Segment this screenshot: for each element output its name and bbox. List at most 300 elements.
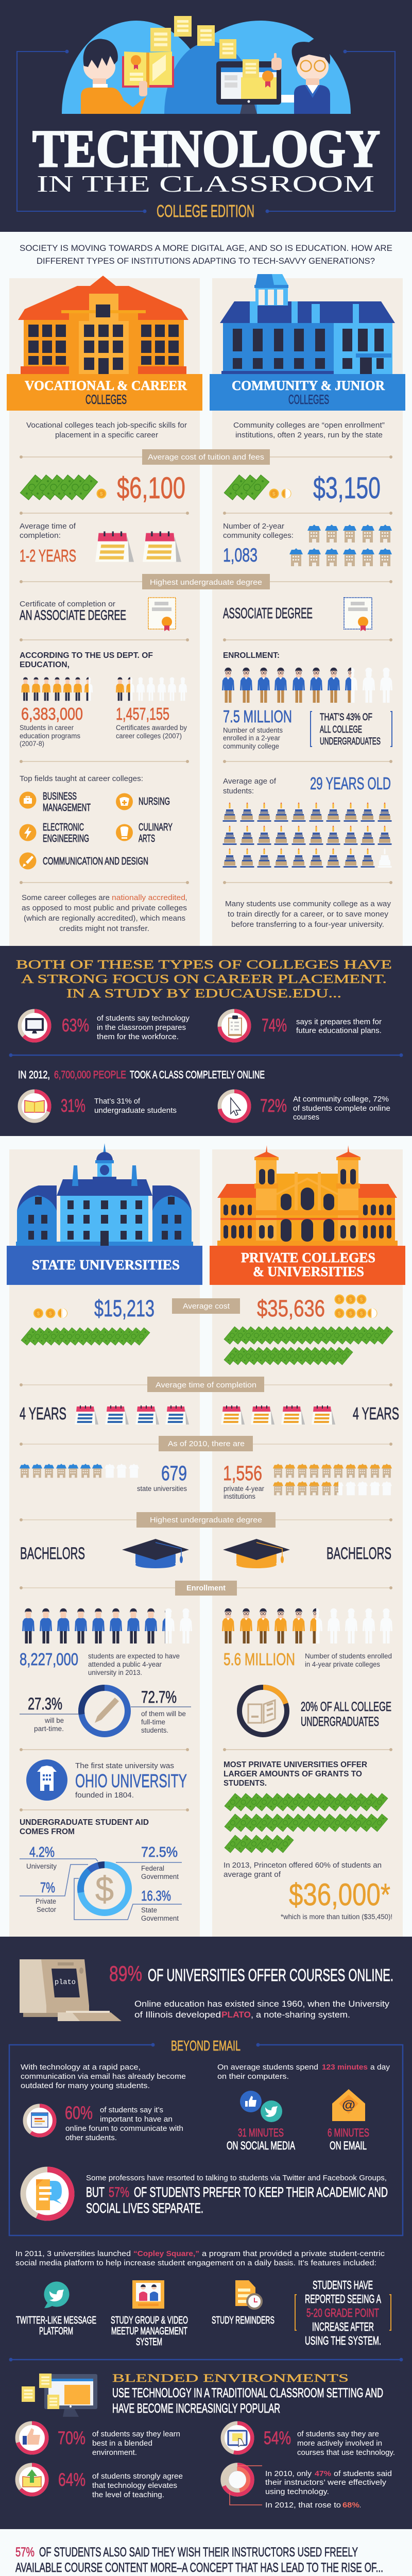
chart: instructors using technology: their instructors’ were effectively [265,2478,387,2487]
hero illustration: students and tablet [62,16,351,114]
text: copley square: social media platform to help increase student engagement on a daily basis. It’s features included: [15,2259,376,2267]
heading: online class takers [18,1069,265,1081]
fact: first state university: The first state university was [75,1762,174,1770]
cost chart: bills and coins [224,475,291,500]
fact: first state university [26,1759,187,1801]
heading: open content [15,2545,383,2575]
donut chart: student aid sources: Sector [37,1906,56,1913]
stat: 6,383,000 students: Students in career [20,724,74,732]
banner: community and junior: COMMUNITY & JUNIOR [232,378,385,393]
stat: Princeton grant: average grant of [224,1871,281,1879]
text: online education history: of Illinois developed [134,2010,221,2020]
stat: 70 percent blended [17,2423,180,2457]
donut chart: part time and full time [20,1685,191,1737]
field: culinary arts [116,822,173,844]
accreditation note: , [185,893,187,902]
feature: twitter-like platform: PLATFORM [39,2326,73,2337]
heading: online class takers: TOOK A CLASS COMPLETELY ONLINE [130,1069,265,1081]
description: Community colleges are “open enrollment” [233,421,385,430]
stat: 6 minutes on email: ON EMAIL [330,2139,367,2152]
accreditation note: nationally accredited [112,893,185,902]
donut chart: student aid sources [20,1844,182,1923]
stat: 60 percent forum: 60% [65,2103,93,2123]
intro text [20,243,392,266]
donut chart: student aid sources: University [26,1862,57,1870]
stat: 5.6 million: in 4-year private colleges [305,1660,380,1668]
donut chart: 20 percent of undergraduates [239,1687,391,1735]
field: electronic engineering: ELECTRONIC [43,822,84,833]
heading: educause study: BOTH OF THESE TYPES OF COLLEGES HAVE [16,958,392,972]
donut chart: part time and full time: 72.7% [141,1688,177,1706]
degree [20,600,126,623]
donut chart: student aid sources: Government [141,1914,179,1922]
text: copley square: a program that provided a private student-centric [202,2249,385,2258]
donut chart: student aid sources: Federal [141,1865,164,1872]
stat: 5.6 million: 5.6 MILLION [224,1650,295,1669]
chart: instructors using technology: 68% [342,2501,359,2510]
banner: vocational and career: COLLEGES [85,393,127,407]
stat: 64 percent teaching: of students strongly agree [92,2472,183,2481]
illustration: blue university building [16,1143,193,1246]
banner: state universities: STATE UNIVERSITIES [32,1257,180,1273]
icon: plato computer: plato [55,1978,76,1987]
stat: 72 percent community college: At community college, 72% [293,1095,389,1104]
heading: open content: 57% [15,2545,35,2560]
stat: 60 percent forum: of students say it’s [100,2106,163,2114]
stat: 1,556 private institutions [223,1462,264,1500]
stat: 4 years: 4 YEARS [20,1404,66,1423]
donut chart: student aid sources: State [141,1906,157,1914]
panel: state universities [7,1143,202,1937]
shared label: enrollment: Enrollment [186,1584,226,1592]
donut chart: part time and full time: of them will be [141,1710,186,1718]
stat: 63 percent workforce [20,1011,190,1041]
intro text: DIFFERENT TYPES OF INSTITUTIONS ADAPTING TO TECH-SAVVY GENERATIONS? [37,256,375,266]
shared label: as of 2010 [20,1436,392,1451]
stat: 679 state universities [137,1462,187,1493]
icon: graduation cap [223,1539,290,1568]
number of colleges [223,522,294,566]
text: online education history: Online education has existed since 1960, when the University [134,1999,390,2009]
stat: 7.5 million: enrolled in a 2-year [223,734,280,742]
heading: student aid [20,1818,149,1836]
stat: 8,227,000: university in 2013. [88,1669,142,1676]
accreditation note: (which are regionally accredited), which means [24,914,185,923]
heading: private grants: STUDENTS. [224,1779,267,1788]
stat: 63 percent workforce: in the classroom prepares [97,1024,186,1032]
field: culinary arts: CULINARY [139,822,173,833]
header panel [0,0,412,232]
icon: diploma [344,598,372,631]
feature: study reminders [212,2280,274,2326]
stat: 5.6 million [224,1650,392,1669]
stat: average age: students: [223,787,254,795]
time of completion [20,522,76,565]
shared label: highest undergraduate degree [20,1512,392,1528]
chart: grant bills [225,1793,388,1853]
intro text: SOCIETY IS MOVING TOWARDS A MORE DIGITAL AGE, AND SO IS EDUCATION. HOW ARE [20,243,392,253]
stat: 31 minutes on social media: ON SOCIAL MEDIA [227,2139,295,2152]
donut chart: student aid sources: 16.3% [141,1888,171,1904]
heading: educause study [16,958,392,1001]
stat: 6 minutes on email: 6 MINUTES [328,2126,369,2139]
donut chart: part time and full time: students. [141,1726,168,1734]
cost chart: bills and coin [20,475,107,500]
stat: 679 state universities: state universities [137,1485,187,1493]
chart: coins and stat $15,213 [33,1295,154,1321]
callout: 43 percent of undergraduates: THAT’S 43% OF [320,712,372,723]
headline: 89 percent [109,1961,393,1986]
stat: 1,457,155 certificates: Certificates awarded by [116,724,187,732]
stat: 31 percent undergraduates: 31% [61,1096,85,1116]
stat: 1,556 private institutions: institutions [224,1493,255,1500]
stat: 64 percent teaching: the level of teaching. [92,2491,164,2499]
stat: 8,227,000: students are expected to have [88,1652,180,1660]
feature: twitter-like platform: TWITTER-LIKE MESSAGE [16,2315,96,2326]
stat: 679 state universities: 679 [161,1462,187,1485]
icon: email envelope: @ [342,2098,355,2112]
title: IN THE CLASSROOM [37,171,374,197]
heading: educause study: IN A STUDY BY EDUCAUSE.EDU... [66,987,341,1001]
stat: 8,227,000: 8,227,000 [20,1650,78,1669]
community college note: before transferring to a four-year university. [231,920,384,929]
stat: 54 percent involved [222,2423,395,2457]
stat: 1,457,155 certificates: 1,457,155 [116,704,169,723]
stat: 63 percent workforce: 63% [62,1015,89,1036]
icon: orange calendars [221,1405,335,1425]
text: online education history: , a note-sharing system. [251,2010,350,2020]
panel: private colleges and universities [210,1145,405,1937]
chart: instructors using technology [222,2465,392,2510]
heading: student aid: COMES FROM [20,1827,75,1836]
stat: 64 percent teaching: that technology elevates [92,2482,177,2490]
description: institutions, often 2 years, run by the state [235,431,383,439]
text: copley square: “Copley Square,” [133,2249,199,2258]
callout: grade point increase: STUDENTS HAVE [313,2278,373,2292]
stat: 6,383,000 students: 6,383,000 [21,704,83,723]
stat: $6,100: $6,100 [117,471,185,505]
donut chart: student aid sources: 72.5% [141,1844,178,1860]
stat: Princeton grant: $36,000* [289,1877,390,1912]
shared label: average time of completion [20,1377,392,1392]
donut chart: student aid sources: Private [36,1897,56,1905]
donut chart: student aid sources: 7% [40,1879,55,1895]
stat: 57 percent separate lives: BUT [86,2184,105,2200]
stat: 54 percent involved: courses that use technology. [297,2449,395,2457]
stat: 60 percent forum [25,2103,183,2142]
stat: 7.5 million: community college [223,742,279,750]
heading: us dept of education: ACCORDING TO THE US DEPT. OF [20,651,153,660]
donut chart: student aid sources: 4.2% [29,1844,55,1860]
feature: study group [111,2280,188,2348]
accreditation note: credits might not transfer. [59,924,149,933]
icon: calendars [95,531,181,562]
stat: 70 percent blended: environment. [92,2449,137,2457]
stat: 54 percent involved: more actively involved in [297,2439,382,2448]
text: minutes on computers: 123 minutes [322,2063,368,2072]
banner: state universities [7,1246,202,1285]
icon: blended monitor [22,2374,97,2417]
pictogram: state universities count [20,1464,139,1478]
chart: instructors using technology: 47% [315,2469,331,2478]
field: electronic engineering [20,822,89,844]
chart: coins and stat $35,636 [257,1294,377,1321]
stat: 64 percent teaching [17,2465,183,2499]
text: email outdated: With technology at a rapid pace, [21,2063,141,2072]
banner: private colleges: PRIVATE COLLEGES [241,1250,375,1265]
text: email outdated: communication via email has already become [21,2072,186,2081]
stat: 1,556 private institutions: 1,556 [223,1462,262,1485]
pictogram: public enrollment [22,1608,192,1643]
donut chart: part time and full time: will be [44,1717,64,1724]
banner: private colleges [210,1246,405,1285]
banner: vocational and career [7,374,202,411]
degree: ASSOCIATE DEGREE [223,605,313,622]
icon: plato computer [20,1959,122,2021]
icon: email envelope [332,2089,365,2121]
headline: 89 percent: 89% [109,1961,142,1986]
heading: us dept of education [20,651,153,669]
heading: blended environments [112,2371,383,2416]
top fields list: Top fields taught at career colleges: [20,775,143,783]
donut chart: part time and full time: full-time [141,1718,165,1726]
shared label: highest undergraduate degree: Highest undergraduate degree [150,579,262,587]
time of completion: Average time of [20,522,76,531]
shared label: average cost of tuition: Average cost of tuition and fees [148,453,264,462]
field: nursing [116,793,170,810]
stat: 1,556 private institutions: private 4-year [224,1485,264,1493]
stat: 6,383,000 students: education programs [20,732,80,740]
top fields list [20,775,173,870]
stat: 54 percent involved: 54% [264,2428,291,2448]
description: placement in a specific career [55,431,158,439]
stat: 31 percent undergraduates [20,1091,177,1121]
banner: community and junior [210,374,405,411]
chart: instructors using technology: In 2010, only [265,2469,312,2478]
stat: Princeton grant [224,1861,392,1921]
shared label: average cost of tuition [20,449,392,465]
field: business management: MANAGEMENT [43,802,91,814]
text: copley square [15,2249,385,2267]
stat: bachelors: BACHELORS [20,1544,85,1563]
banner: vocational and career: VOCATIONAL & CAREER [25,378,187,393]
stat: 72 percent community college: 72% [260,1096,287,1116]
heading: online class takers: IN 2012, [18,1069,50,1081]
degree: Certificate of completion or [20,600,115,608]
shared label: highest undergraduate degree: Highest undergraduate degree [150,1516,262,1524]
chart: bills private [224,1327,393,1365]
illustration: orange college building [18,276,188,374]
stat: 60 percent forum: online forum to communicate with [65,2125,183,2133]
stat: 72 percent community college: courses [293,1113,319,1122]
description [233,421,385,439]
pictogram: private institutions count [273,1464,392,1495]
pictogram: birthday cakes [222,802,391,868]
donut chart: part time and full time: part-time. [34,1725,64,1733]
stat: average age [223,774,391,795]
banner: private colleges: & UNIVERSITIES [253,1264,364,1279]
dark panel: career placement [0,946,412,1136]
donut chart: student aid sources: $ [95,1870,114,1909]
title: TECHNOLOGY [32,120,380,178]
number of colleges: Number of 2-year [223,522,284,531]
stat: 7.5 million [223,707,292,750]
stat: 57 percent separate lives [23,2170,388,2218]
feature: twitter-like platform [16,2281,96,2337]
donut chart: part time and full time: 27.3% [28,1694,62,1713]
stat: 74 percent plans: says it prepares them for [296,1018,382,1026]
stat: Princeton grant: *which is more than tuition ($35,450)! [281,1913,392,1921]
banner: community and junior: COLLEGES [288,393,329,407]
stat: 7.5 million: Number of students [223,726,283,734]
donut chart: student aid sources: Government [141,1873,179,1880]
field: business management: BUSINESS [43,791,77,802]
community college note [225,900,391,929]
heading: student aid: UNDERGRADUATE STUDENT AID [20,1818,149,1827]
section: moocs [15,2547,383,2572]
shared label: highest undergraduate degree [20,574,392,589]
text: minutes on computers [217,2063,390,2081]
feature: study group: SYSTEM [136,2336,162,2348]
heading: private grants: MOST PRIVATE UNIVERSITIES OFFER [224,1760,367,1769]
stat: 57 percent separate lives: Some professors have resorted to talking to students via Twitter and Facebook Groups, [86,2174,387,2182]
accreditation note: as opposed to most public and private colleges [22,904,187,912]
community college note: to train directly for a career, or to save money [228,910,389,919]
pictogram: certificates awarded [116,677,187,701]
chart: instructors using technology: . [359,2501,361,2510]
time of completion: 1-2 YEARS [20,546,76,565]
stat: 74 percent plans [219,1011,382,1041]
stat: 6,383,000 students: (2007-8) [20,740,44,748]
description [26,421,187,439]
field: business management [20,791,91,814]
callout: grade point increase: 5-20 GRADE POINT [306,2306,379,2319]
stat: 64 percent teaching: 64% [58,2470,85,2490]
heading: online class takers: 6,700,000 PEOPLE [54,1069,126,1081]
stat: 8,227,000: attended a public 4-year [88,1660,162,1668]
stat: 6,383,000 students [20,704,83,748]
number of colleges: community colleges: [223,532,294,540]
callout: 43 percent of undergraduates: ALL COLLEGE [320,724,362,735]
pictogram: private enrollment [222,1608,392,1643]
icon: diploma [148,598,176,631]
number of colleges: 1,083 [223,545,258,566]
fact: first state university: founded in 1804. [75,1791,134,1800]
callout: grade point increase: INCREASE AFTER [312,2320,374,2333]
stat: 63 percent workforce: them for the workforce. [97,1033,179,1041]
stat: 60 percent forum: other students. [65,2134,117,2142]
illustration: orange university building [217,1145,398,1246]
stat: 5.6 million: Number of students enrolled [305,1652,392,1660]
dark panel: online courses [0,1937,412,2529]
fact: first state university: OHIO UNIVERSITY [75,1770,187,1791]
feature: study reminders: STUDY REMINDERS [212,2315,274,2326]
stat: 57 percent separate lives: 57% [109,2184,129,2200]
heading: private grants [224,1760,367,1788]
text: online education history [134,1999,390,2020]
pictogram: students in career programs [21,677,93,701]
text: minutes on computers: a day [370,2063,390,2072]
stat: 1,457,155 certificates: career colleges (2007) [116,732,182,740]
stat: 31 percent undergraduates: undergraduate students [94,1107,177,1115]
stat: 54 percent involved: of students say they are [297,2430,379,2438]
stat: 1,457,155 certificates [116,704,187,740]
stat: 74 percent plans: 74% [262,1015,287,1036]
stat: 31 minutes on social media: 31 MINUTES [238,2126,284,2139]
stat: 60 percent forum: important to have an [100,2115,173,2124]
field: electronic engineering: ENGINEERING [43,833,89,844]
community college note: Many students use community college as a way [225,900,391,908]
heading: private grants: LARGER AMOUNTS OF GRANTS TO [224,1770,362,1778]
field: nursing: NURSING [139,796,170,807]
shared label: average cost [172,1298,240,1314]
chart: coins and stat $35,636: $35,636 [257,1295,325,1321]
degree: AN ASSOCIATE DEGREE [20,607,126,623]
stat: 57 percent separate lives: SOCIAL LIVES SEPARATE. [86,2200,203,2216]
shared label: as of 2010: As of 2010, there are [168,1440,245,1448]
chart: instructors using technology: of students said [334,2469,392,2478]
accreditation note: Some career colleges are [22,893,110,902]
chart: instructors using technology: using technology. [265,2487,329,2496]
stat: 8,227,000 [20,1650,180,1676]
stat: $3,150: $3,150 [313,471,381,505]
stat: 72 percent community college: of students complete online [293,1105,390,1113]
heading: blended environments: BLENDED ENVIRONMENTS [112,2371,349,2384]
field: culinary arts: ARTS [139,833,155,844]
stat: 31 percent undergraduates: That’s 31% of [94,1097,141,1106]
stat: 74 percent plans: future educational plans. [296,1027,382,1035]
callout: 43 percent of undergraduates: UNDERGRADUATES [320,736,381,747]
text: minutes on computers: on their computers. [217,2072,289,2081]
panel: community and junior colleges [210,274,405,946]
chart: instructors using technology: In 2012, that rose to [265,2501,341,2510]
feature: study group: MEETUP MANAGEMENT [111,2326,187,2337]
text: email outdated [21,2063,186,2090]
text: online education history: PLATO [221,2010,251,2020]
stat: Princeton grant: In 2013, Princeton offered 60% of students an [224,1861,382,1870]
heading: enrollment: ENROLLMENT: [223,651,280,660]
stat: 31 minutes on social media [227,2126,295,2152]
accreditation note [22,893,187,933]
heading: us dept of education: EDUCATION, [20,660,70,669]
text: email outdated: outdated for many young students. [21,2081,150,2090]
icon: graduation cap [122,1539,189,1568]
shared label: average cost: Average cost [183,1302,230,1311]
chart: coins and stat $15,213: $15,213 [94,1295,154,1321]
heading: blended environments: HAVE BECOME INCREASINGLY POPULAR [112,2401,280,2416]
stat: 6 minutes on email [328,2126,369,2152]
stat: 7.5 million: 7.5 MILLION [223,707,292,726]
stat: 70 percent blended: 70% [58,2428,85,2448]
subtitle: college edition: COLLEGE EDITION [157,201,254,221]
stat: 72 percent community college [219,1091,390,1122]
icon: social media [240,2091,282,2122]
chart: bills state [21,1328,150,1345]
shared label: enrollment [20,1581,392,1596]
heading: beyond email: BEYOND EMAIL [171,2038,241,2054]
field: communication and design: COMMUNICATION AND DESIGN [43,856,148,867]
shared label: average time of completion: Average time of completion [156,1381,256,1389]
callout: 43 percent of undergraduates [311,711,392,747]
icon: blue calendars [75,1405,189,1425]
text: minutes on computers: On average students spend [217,2063,318,2072]
time of completion: completion: [20,532,61,540]
pictogram: college buildings [289,524,392,566]
stat: 63 percent workforce: of students say technology [97,1014,190,1023]
description: Vocational colleges teach job-specific skills for [26,421,187,430]
stat: average age: Average age of [223,777,277,786]
callout: grade point increase [295,2278,391,2347]
